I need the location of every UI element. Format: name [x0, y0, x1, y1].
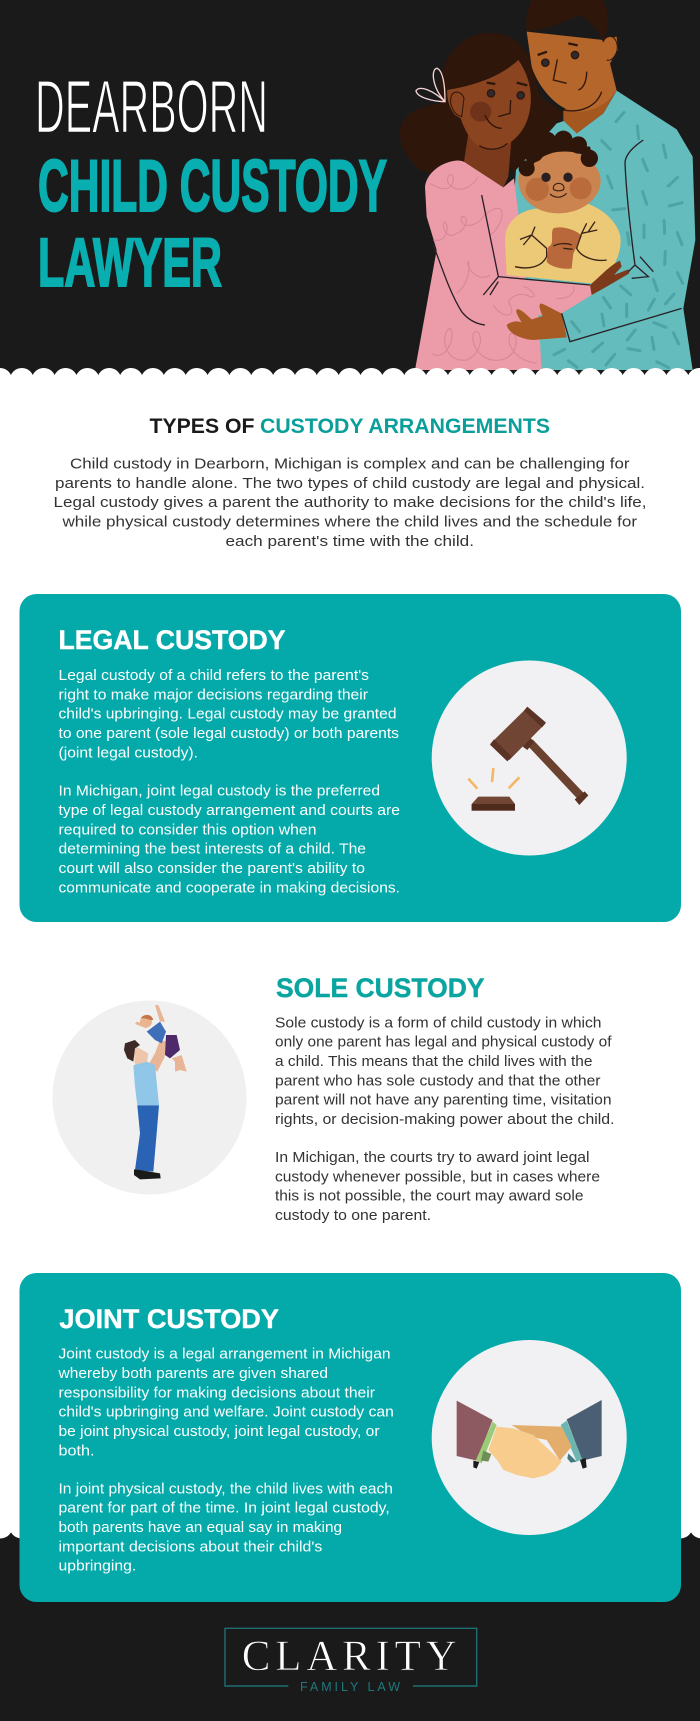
text block: joint custody: child's upbringing and welfare. Joint custody can — [58, 1404, 394, 1421]
baby's face features — [541, 173, 573, 182]
text block: joint custody: both. — [58, 1442, 94, 1459]
intro paragraph: each parent's time with the child. — [226, 533, 474, 550]
woman's face — [447, 60, 531, 150]
intro paragraph: Legal custody gives a parent the authority to make decisions for the child's life, — [54, 494, 646, 511]
text block: legal custody — [58, 667, 400, 896]
man's shirt — [513, 91, 695, 370]
baby's head — [518, 150, 601, 213]
dress pattern — [430, 175, 574, 363]
man's neck — [563, 90, 617, 133]
woman's ear — [451, 92, 464, 117]
illustration: family hugging — [400, 0, 695, 370]
woman's cheek — [470, 102, 491, 122]
text block: joint custody: both parents have an equal say in making — [58, 1519, 342, 1536]
text block: joint custody: parent for part of the time. In joint legal custody, — [58, 1500, 390, 1517]
shirt pattern — [554, 112, 683, 368]
title: LAWYER — [38, 224, 222, 301]
text block: sole custody: Sole custody is a form of child custody in which — [275, 1014, 602, 1031]
text block: legal custody: child's upbringing. Legal custody may be granted — [58, 706, 396, 723]
man's hair — [526, 0, 608, 43]
text block: sole custody — [275, 1014, 614, 1224]
panel: joint custody — [20, 1273, 681, 1602]
heading: sole custody: SOLE CUSTODY — [276, 973, 484, 1003]
man's head — [527, 32, 618, 112]
intro paragraph: Child custody in Dearborn, Michigan is complex and can be challenging for — [70, 456, 630, 473]
man's ear — [603, 36, 617, 60]
baby's arms lines — [515, 222, 607, 268]
title: CHILD CUSTODY — [38, 146, 387, 227]
baby's sweater — [505, 203, 621, 285]
baby's hands — [547, 227, 582, 269]
text block: joint custody: upbringing. — [58, 1558, 136, 1575]
intro paragraph — [54, 456, 646, 550]
baby's cheeks — [526, 178, 549, 201]
text block: joint custody: Joint custody is a legal arrangement in Michigan — [58, 1346, 390, 1363]
panel: sole custody — [52, 973, 614, 1224]
heading: joint custody: JOINT CUSTODY — [59, 1304, 279, 1334]
logo: Clarity Family Law: CLARITY — [242, 1633, 457, 1680]
text block: legal custody: type of legal custody arrangement and courts are — [58, 802, 400, 819]
text block: legal custody: required to consider this option when — [58, 821, 316, 838]
text block: legal custody: communicate and cooperate in making decisions. — [58, 879, 400, 896]
header banner — [0, 0, 700, 392]
text block: joint custody: responsibility for making decisions about their — [58, 1384, 375, 1401]
text block: joint custody: important decisions about their child's — [58, 1538, 322, 1555]
baby's hair — [519, 131, 598, 176]
panel: legal custody — [20, 594, 681, 922]
text block: legal custody: In Michigan, joint legal custody is the preferred — [58, 783, 380, 800]
icon: parent lifting child — [52, 1000, 246, 1194]
logo: Clarity Family Law — [225, 1628, 477, 1694]
text block: sole custody: a child. This means that the child lives with the — [275, 1053, 592, 1070]
icon: gavel — [432, 660, 627, 856]
text block: legal custody: to one parent (sole legal custody) or both parents — [58, 725, 399, 742]
heading: legal custody: LEGAL CUSTODY — [58, 625, 286, 655]
text block: joint custody — [57, 1346, 394, 1575]
intro paragraph: parents to handle alone. The two types of child custody are legal and physical. — [55, 475, 645, 492]
text block: joint custody: be joint physical custody, joint legal custody, or — [58, 1423, 380, 1440]
text block: joint custody: whereby both parents are given shared — [57, 1365, 328, 1382]
section heading: TYPES OF — [150, 415, 255, 438]
text block: legal custody: court will also consider the parent's ability to — [58, 860, 365, 877]
text block: sole custody: this is not possible, the court may award sole — [275, 1188, 584, 1205]
footer background — [0, 1512, 700, 1721]
title: DEARBORN — [35, 65, 268, 149]
woman's neck — [464, 133, 512, 187]
title — [35, 65, 387, 301]
text block: legal custody: determining the best interests of a child. The — [58, 841, 366, 858]
man's hand — [507, 303, 567, 340]
text block: legal custody: (joint legal custody). — [58, 744, 198, 761]
logo: Clarity Family Law: FAMILY LAW — [300, 1680, 400, 1694]
man's face features — [538, 43, 602, 111]
text block: sole custody: only one parent has legal and physical custody of — [275, 1034, 612, 1051]
woman's hand — [590, 261, 629, 295]
section heading: CUSTODY ARRANGEMENTS — [260, 415, 550, 438]
text block: sole custody: custody to one parent. — [275, 1207, 431, 1224]
text block: legal custody: Legal custody of a child refers to the parent's — [58, 667, 369, 684]
text block: sole custody: parent will not have any parenting time, visitation — [275, 1092, 612, 1109]
text block: sole custody: parent who has sole custody and that the other — [275, 1072, 601, 1089]
woman's dress — [415, 161, 592, 370]
woman's hair — [400, 33, 565, 178]
scalloped edge — [0, 368, 700, 392]
text block: legal custody: right to make major decisions regarding their — [58, 686, 368, 703]
text block: sole custody: In Michigan, the courts try to award joint legal — [275, 1149, 590, 1166]
woman's face features — [479, 83, 527, 149]
text block: sole custody: rights, or decision-making power about the child. — [275, 1111, 614, 1128]
clothing lines — [433, 140, 682, 342]
text block: sole custody: custody whenever possible, but in cases where — [275, 1168, 600, 1185]
bow — [416, 68, 445, 102]
intro paragraph: while physical custody determines where the child lives and the schedule for — [61, 514, 637, 530]
text block: joint custody: In joint physical custody, the child lives with each — [58, 1480, 393, 1497]
icon: handshake — [432, 1340, 627, 1535]
